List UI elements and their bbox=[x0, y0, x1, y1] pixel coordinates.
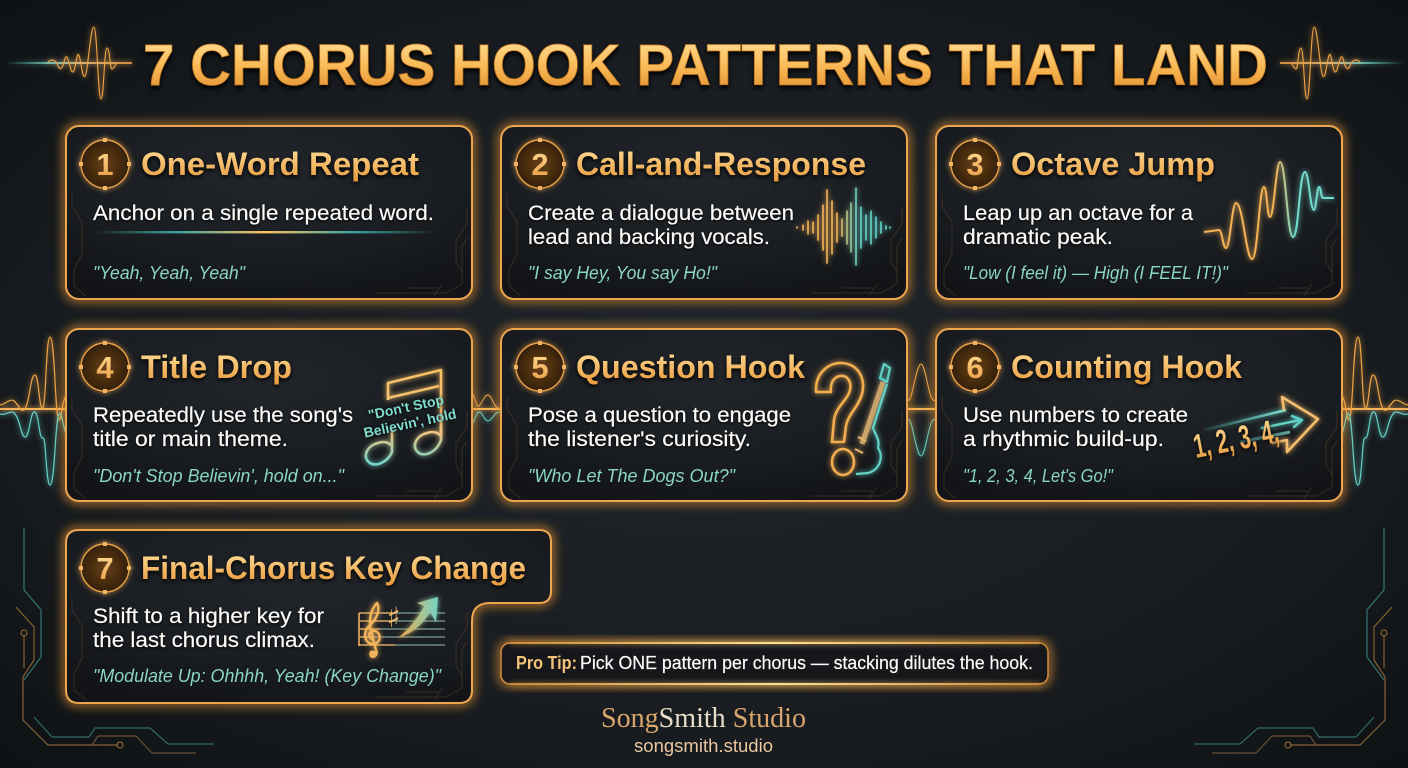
heading: Title Drop bbox=[141, 349, 292, 385]
heading: Final-Chorus Key Change bbox=[141, 550, 526, 586]
description bbox=[93, 404, 353, 451]
number badge bbox=[949, 341, 1001, 393]
example quote: "Don't Stop Believin', hold on..." bbox=[93, 466, 346, 486]
description: Shift to a higher key for bbox=[93, 605, 324, 628]
description: title or main theme. bbox=[93, 428, 288, 451]
description: Pose a question to engage bbox=[528, 404, 791, 427]
example quote: "Low (I feel it) — High (I FEEL IT!)" bbox=[963, 263, 1230, 283]
icon: music notes with lyric bbox=[362, 370, 458, 464]
tip text: Pick ONE pattern per chorus — stacking dilutes the hook. bbox=[580, 653, 1033, 673]
decorative waveform: top right bbox=[1280, 27, 1405, 99]
number badge: 7 bbox=[96, 551, 114, 586]
decorative waveform: middle left bbox=[0, 337, 70, 485]
example quote: "Who Let The Dogs Out?" bbox=[528, 466, 737, 486]
panel: 6 Counting Hook bbox=[936, 329, 1342, 501]
card frame bbox=[501, 126, 907, 299]
website: songsmith.studio bbox=[634, 736, 773, 756]
number badge bbox=[949, 138, 1001, 190]
panel: 3 Octave Jump bbox=[936, 126, 1342, 299]
number badge: 5 bbox=[531, 350, 549, 385]
panel: 5 Question Hook bbox=[501, 329, 907, 501]
description: lead and backing vocals. bbox=[528, 226, 770, 249]
number badge: 1 bbox=[96, 147, 114, 182]
number badge: 3 bbox=[966, 147, 984, 182]
description: Anchor on a single repeated word. bbox=[93, 202, 434, 225]
panel: 7 Final-Chorus Key Change bbox=[66, 530, 551, 703]
tip label: Pro Tip: bbox=[516, 653, 577, 673]
icon: counting arrow: 1, 2, 3, 4, bbox=[1190, 412, 1282, 465]
heading: Octave Jump bbox=[1011, 146, 1215, 182]
description: the listener's curiosity. bbox=[528, 428, 751, 451]
description bbox=[528, 202, 794, 249]
icon: music notes with lyric: "Don't Stop bbox=[367, 391, 445, 423]
example quote: "1, 2, 3, 4, Let's Go!" bbox=[963, 466, 1114, 486]
description: Create a dialogue between bbox=[528, 202, 794, 225]
pro tip callout bbox=[501, 643, 1048, 684]
icon: staff with rising arrow: ♯ bbox=[387, 601, 401, 634]
card frame bbox=[936, 329, 1342, 501]
number badge bbox=[79, 542, 131, 594]
decorative waveform: gap between cards 4 and 5 bbox=[470, 390, 501, 425]
example quote: "Modulate Up: Ohhhh, Yeah! (Key Change)" bbox=[93, 666, 443, 686]
heading: One-Word Repeat bbox=[141, 146, 419, 182]
description bbox=[963, 404, 1188, 451]
panel: 1 One-Word Repeat bbox=[66, 126, 472, 299]
card frame bbox=[936, 126, 1342, 299]
icon: question mark and guitar bbox=[816, 363, 890, 475]
icon: octave waveform bbox=[1204, 162, 1334, 259]
description: Use numbers to create bbox=[963, 404, 1188, 427]
decorative waveform: top left bbox=[5, 27, 132, 99]
decorative waveform: gap between cards 5 and 6 bbox=[907, 364, 936, 456]
example quote: "I say Hey, You say Ho!" bbox=[528, 263, 719, 283]
card frame bbox=[66, 329, 472, 501]
number badge: 6 bbox=[966, 350, 984, 385]
description: a rhythmic build-up. bbox=[963, 428, 1164, 451]
heading: Counting Hook bbox=[1011, 349, 1242, 385]
example quote: "Yeah, Yeah, Yeah" bbox=[93, 263, 247, 283]
number badge: 2 bbox=[531, 147, 549, 182]
description bbox=[528, 404, 791, 451]
icon: staff with rising arrow bbox=[359, 597, 445, 657]
circuit traces: bottom left bbox=[16, 528, 214, 753]
heading: Call-and-Response bbox=[576, 146, 866, 182]
description bbox=[93, 605, 324, 652]
glowing divider bbox=[95, 231, 435, 233]
icon: sound wave bbox=[797, 188, 890, 265]
description: the last chorus climax. bbox=[93, 629, 315, 652]
number badge bbox=[79, 138, 131, 190]
callout frame bbox=[501, 643, 1048, 684]
title: 7 CHORUS HOOK PATTERNS THAT LAND bbox=[143, 33, 1268, 98]
brand name: SongSmith Studio bbox=[601, 703, 806, 734]
description: Leap up an octave for a bbox=[963, 202, 1193, 225]
panel: 2 Call-and-Response bbox=[501, 126, 907, 299]
card frame bbox=[66, 530, 551, 703]
number badge bbox=[514, 341, 566, 393]
heading: Question Hook bbox=[576, 349, 805, 385]
card frame bbox=[501, 329, 907, 501]
number badge: 4 bbox=[96, 350, 114, 385]
number badge bbox=[79, 341, 131, 393]
decorative waveform: middle right bbox=[1338, 337, 1408, 485]
card frame bbox=[66, 126, 472, 299]
number badge bbox=[514, 138, 566, 190]
panel: 4 Title Drop bbox=[66, 329, 472, 501]
circuit traces: bottom right bbox=[1194, 528, 1392, 753]
icon: music notes with lyric: Believin', hold bbox=[362, 405, 458, 441]
description: Repeatedly use the song's bbox=[93, 404, 353, 427]
description: dramatic peak. bbox=[963, 226, 1113, 249]
description bbox=[963, 202, 1193, 249]
